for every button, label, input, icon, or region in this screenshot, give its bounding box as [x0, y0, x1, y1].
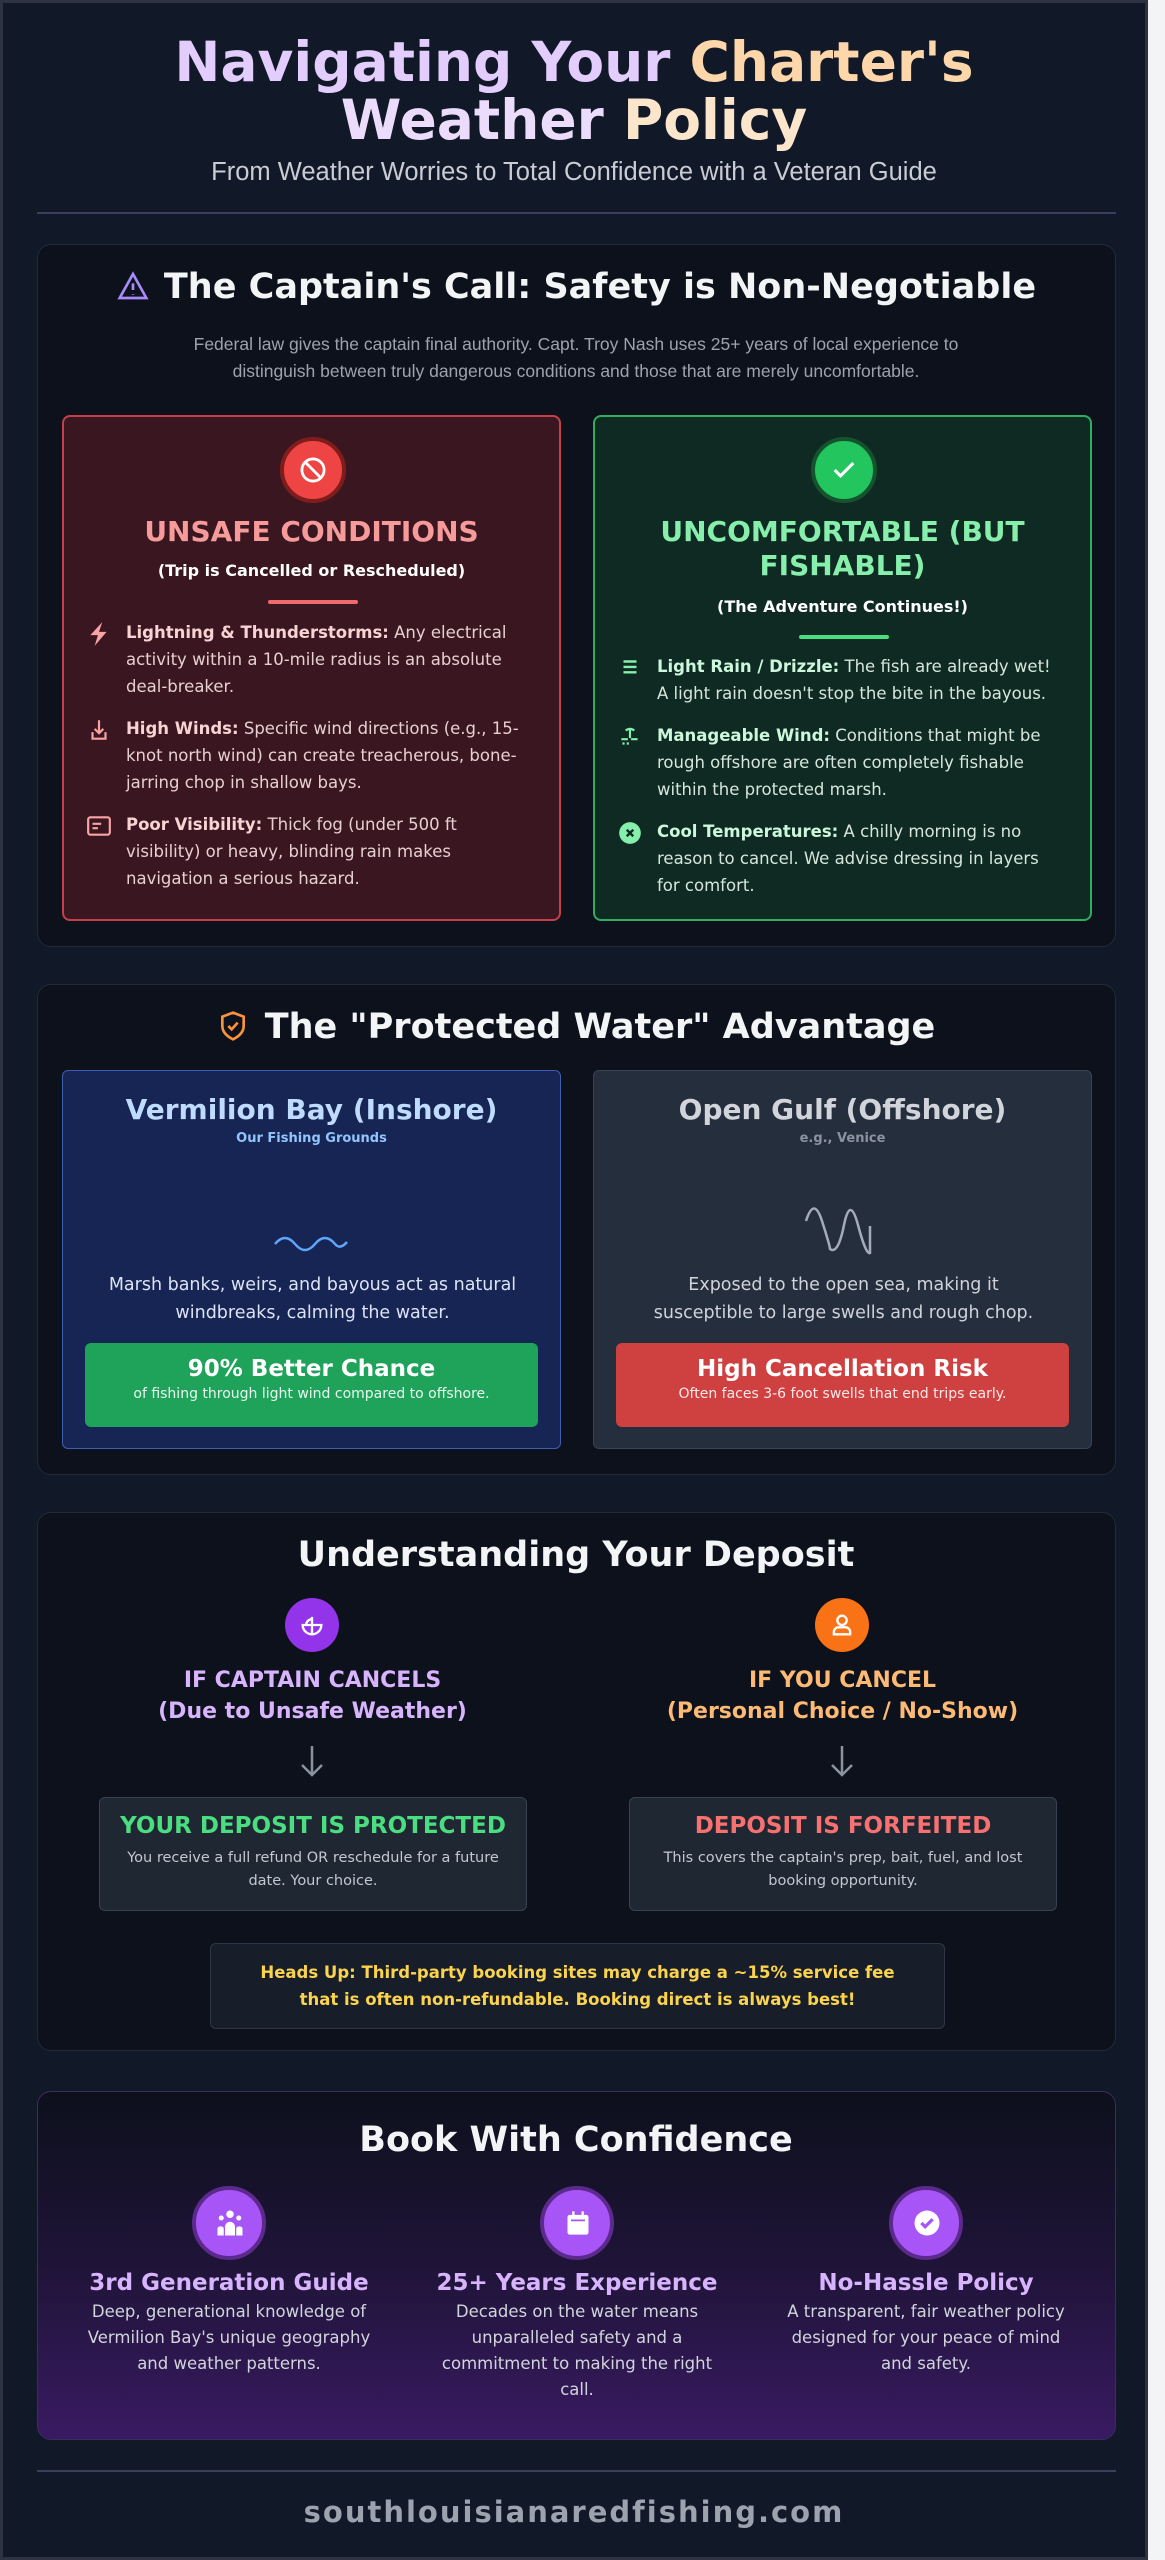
- arrow: [301, 1746, 323, 1777]
- column: captain cancels: (Due to Unsafe Weather): [158, 1699, 467, 1724]
- callout: heads up: [210, 1943, 945, 2029]
- icon: rough wave: [804, 1207, 872, 1254]
- feature: 3rd generation: Deep, generational knowledge of Vermilion Bay's unique geography and weather patterns.: [88, 2302, 370, 2373]
- callout: high risk: High Cancellation Risk: [697, 1356, 988, 1382]
- heading: captain's call: The Captain's Call: Safety is Non-Negotiable: [164, 267, 1036, 307]
- intro paragraph: distinguish between truly dangerous conditions and those that are merely uncomfortable.: [233, 361, 919, 381]
- feature: no-hassle: No-Hassle Policy: [818, 2270, 1034, 2296]
- item: wind: Manageable Wind: Conditions that might be rough offshore are often completely fishable within the protected marsh.: [657, 726, 1040, 799]
- item: cool: Cool Temperatures: A chilly morning is no reason to cancel. We advise dressing in layers for comfort.: [657, 822, 1039, 895]
- card: open gulf: susceptible to large swells and rough chop.: [654, 1303, 1033, 1323]
- feature: 25+ years: Decades on the water means unparalleled safety and a commitment to making the right call.: [442, 2302, 712, 2399]
- callout: 90% better: [85, 1343, 538, 1427]
- icon: check: [811, 437, 877, 503]
- item: lightning: Lightning & Thunderstorms: Any electrical activity within a 10-mile radius is an absolute deal-breaker.: [126, 623, 506, 696]
- column: captain cancels: IF CAPTAIN CANCELS: [184, 1668, 441, 1693]
- icon: calendar: [540, 2186, 614, 2260]
- box: forfeited: This covers the captain's prep, bait, fuel, and lost booking opportunity.: [664, 1850, 1022, 1889]
- feature: no-hassle: [787, 2186, 1065, 2373]
- card title: UNSAFE CONDITIONS: [144, 515, 479, 548]
- card title: FISHABLE): [760, 549, 925, 582]
- callout: 90% better: of fishing through light wind compared to offshore.: [133, 1386, 490, 1402]
- icon: captain: [285, 1598, 339, 1652]
- card: vermilion bay: [62, 1070, 561, 1449]
- feature: 3rd generation: 3rd Generation Guide: [89, 2270, 369, 2296]
- feature: 25+ years: [436, 2186, 718, 2399]
- column: captain cancels: [99, 1598, 527, 1911]
- heading: confidence: Book With Confidence: [359, 2120, 793, 2160]
- heading: protected water: The "Protected Water" Advantage: [265, 1007, 935, 1047]
- panel: deposit: [37, 1512, 1116, 2051]
- icon: prohibited: [280, 437, 346, 503]
- card: uncomfortable: (The Adventure Continues!): [717, 597, 968, 616]
- feature: 3rd generation: [88, 2186, 370, 2373]
- card: vermilion bay: Our Fishing Grounds: [236, 1131, 387, 1146]
- box: forfeited: DEPOSIT IS FORFEITED: [695, 1813, 991, 1839]
- box: protected: YOUR DEPOSIT IS PROTECTED: [120, 1813, 506, 1839]
- column: you cancel: [629, 1598, 1057, 1911]
- card: open gulf: Exposed to the open sea, making it: [688, 1275, 999, 1295]
- box: protected: You receive a full refund OR reschedule for a future date. Your choice.: [127, 1850, 499, 1889]
- title: [174, 30, 974, 152]
- panel: book with confidence: [37, 2091, 1116, 2440]
- icon: group: [192, 2186, 266, 2260]
- arrow: [831, 1746, 853, 1777]
- card: open gulf: e.g., Venice: [800, 1131, 885, 1146]
- column: you cancel: IF YOU CANCEL: [749, 1668, 936, 1693]
- feature: no-hassle: A transparent, fair weather policy designed for your peace of mind and safety.: [787, 2302, 1065, 2373]
- card title: [660, 515, 1025, 582]
- card title: UNCOMFORTABLE (BUT: [660, 515, 1025, 548]
- callout: heads up: that is often non-refundable. Booking direct is always best!: [300, 1990, 855, 2009]
- card: unsafe conditions: (Trip is Cancelled or Rescheduled): [158, 561, 465, 580]
- box: forfeited: [629, 1797, 1057, 1911]
- item: visibility: Poor Visibility: Thick fog (under 500 ft visibility) or heavy, blinding rain makes navigation a serious hazard.: [126, 815, 457, 888]
- intro paragraph: [194, 334, 958, 381]
- icon: check badge: [889, 2186, 963, 2260]
- subtitle: From Weather Worries to Total Confidence with a Veteran Guide: [211, 158, 937, 186]
- card: open gulf: Open Gulf (Offshore): [679, 1093, 1006, 1126]
- card: open gulf: [593, 1070, 1092, 1449]
- panel: protected water: [37, 984, 1116, 1475]
- card: uncomfortable: [593, 415, 1092, 921]
- callout: 90% better: 90% Better Chance: [188, 1356, 435, 1382]
- item: winds: High Winds: Specific wind directions (e.g., 15-knot north wind) can create treacherous, bone-jarring chop in shallow bays.: [126, 719, 519, 792]
- callout: high risk: Often faces 3-6 foot swells that end trips early.: [679, 1386, 1006, 1402]
- footer: website: southlouisianaredfishing.com: [304, 2495, 844, 2529]
- card: vermilion bay: Marsh banks, weirs, and bayous act as natural windbreaks, calming the water.: [109, 1275, 516, 1323]
- column: you cancel: (Personal Choice / No-Show): [667, 1699, 1018, 1724]
- item: rain: A light rain doesn't stop the bite in the bayous.: [657, 684, 1046, 703]
- title: Navigating Your Charter's: [174, 30, 974, 94]
- callout: high risk: [616, 1343, 1069, 1427]
- icon: calm wave: [274, 1236, 348, 1252]
- heading: deposit: Understanding Your Deposit: [298, 1535, 854, 1575]
- item: rain: [624, 657, 1051, 703]
- callout: heads up: Heads Up: Third-party booking sites may charge a ~15% service fee: [260, 1963, 895, 1982]
- icon: person: [815, 1598, 869, 1652]
- panel: captain's call: [37, 244, 1116, 947]
- box: protected: [99, 1797, 527, 1911]
- feature: 25+ years: 25+ Years Experience: [436, 2270, 718, 2296]
- title: Weather Policy: [341, 88, 807, 152]
- intro paragraph: Federal law gives the captain final authority. Capt. Troy Nash uses 25+ years of local experience to: [194, 334, 958, 354]
- card: vermilion bay: Vermilion Bay (Inshore): [126, 1093, 497, 1126]
- item: rain: Light Rain / Drizzle: The fish are already wet!: [657, 657, 1051, 676]
- card: unsafe conditions: [62, 415, 561, 921]
